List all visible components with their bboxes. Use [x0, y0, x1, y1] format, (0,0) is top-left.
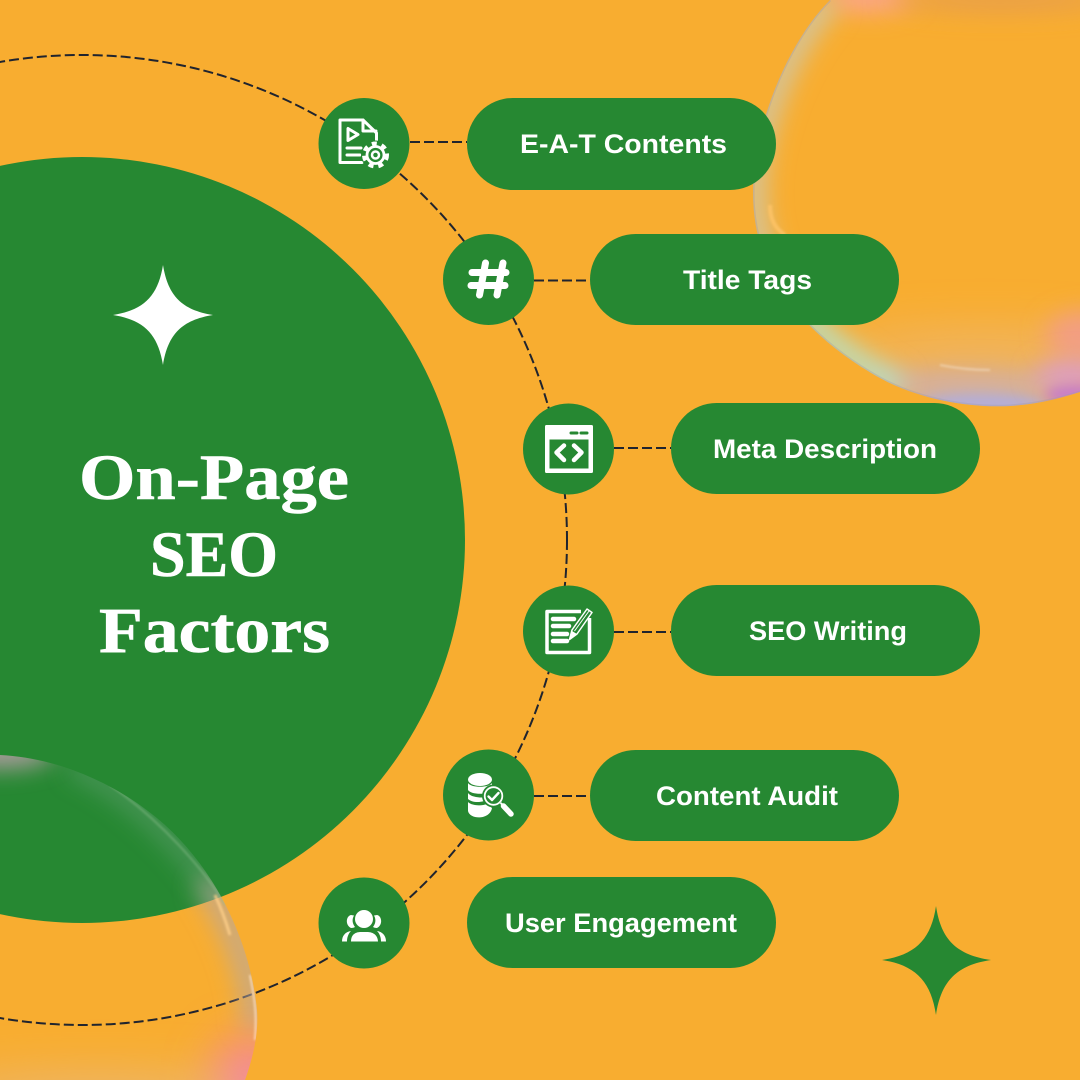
icon: writing pad with pencil: [523, 586, 614, 676]
pill: Title Tags: [590, 234, 899, 325]
icon: users group: [318, 878, 410, 968]
pill: Meta Description: Meta Description: [713, 434, 937, 464]
icon: green sparkle: [882, 906, 991, 1015]
pill: User Engagement: [467, 877, 776, 968]
dashed orbit ring: [0, 55, 567, 1025]
icon: white sparkle: [113, 265, 213, 365]
item: SEO Writing: [523, 585, 980, 676]
pill: SEO Writing: SEO Writing: [749, 616, 907, 646]
item: E-A-T Contents: [318, 98, 776, 190]
big green circle: [0, 157, 465, 923]
pill: Title Tags: Title Tags: [683, 265, 812, 295]
title: On-Page: [79, 442, 349, 514]
icon: database with magnifier: [443, 750, 534, 840]
item: Meta Description: [523, 403, 980, 494]
pill: User Engagement: User Engagement: [505, 908, 737, 938]
icon: code window: [523, 404, 614, 494]
item: Title Tags: [443, 234, 899, 325]
pill: E-A-T Contents: [467, 98, 776, 190]
title: Factors: [99, 595, 330, 667]
icon: document with gear: [318, 98, 410, 189]
pill: Content Audit: [590, 750, 899, 841]
bubble: bottom left: [0, 755, 258, 1080]
pill: Meta Description: [671, 403, 980, 494]
pill: E-A-T Contents: E-A-T Contents: [520, 129, 727, 159]
item: User Engagement: [318, 877, 776, 968]
title: [79, 442, 349, 667]
title: SEO: [150, 519, 278, 591]
icon: hash: [443, 234, 534, 325]
pill: SEO Writing: [671, 585, 980, 676]
connector lines: [410, 142, 671, 796]
item: Content Audit: [443, 750, 899, 841]
bubble: top right: [753, 0, 1080, 416]
pill: Content Audit: Content Audit: [656, 781, 838, 811]
